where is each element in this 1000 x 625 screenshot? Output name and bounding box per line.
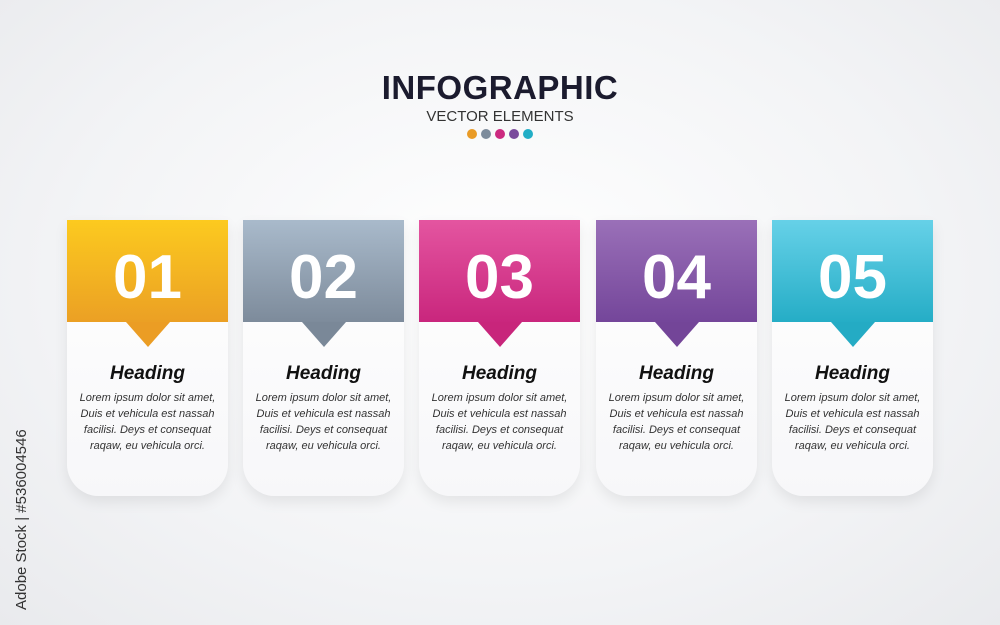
card 01: Lorem ipsum dolor sit amet, Duis et vehicula est nassah facilisi. Deys et consequat raqaw, eu vehicula orci.	[80, 392, 215, 452]
card 05: Heading	[815, 363, 890, 384]
card 03: 03	[465, 243, 534, 312]
card 03: Heading	[462, 363, 537, 384]
card 02: 02	[289, 243, 358, 312]
card 03	[419, 220, 580, 496]
card 01	[67, 220, 228, 496]
title: INFOGRAPHIC	[382, 69, 618, 106]
card 04: Heading	[639, 363, 714, 384]
card 02: Lorem ipsum dolor sit amet, Duis et vehicula est nassah facilisi. Deys et consequat raqaw, eu vehicula orci.	[256, 392, 391, 452]
card 04: 04	[642, 243, 711, 312]
card 04	[596, 220, 757, 496]
card 01: Heading	[110, 363, 185, 384]
card 02	[243, 220, 404, 496]
title	[382, 69, 618, 139]
card 03: Lorem ipsum dolor sit amet, Duis et vehicula est nassah facilisi. Deys et consequat raqaw, eu vehicula orci.	[432, 392, 567, 452]
card 05	[772, 220, 933, 496]
card 04: Lorem ipsum dolor sit amet, Duis et vehicula est nassah facilisi. Deys et consequat raqaw, eu vehicula orci.	[609, 392, 744, 452]
watermark side text: Adobe Stock | #536004546	[13, 429, 30, 610]
card 02: Heading	[286, 363, 361, 384]
card 01: 01	[113, 243, 182, 312]
title: VECTOR ELEMENTS	[426, 108, 574, 125]
card 05: Lorem ipsum dolor sit amet, Duis et vehicula est nassah facilisi. Deys et consequat raqaw, eu vehicula orci.	[785, 392, 920, 452]
card 05: 05	[818, 243, 887, 312]
color dots	[467, 129, 533, 139]
